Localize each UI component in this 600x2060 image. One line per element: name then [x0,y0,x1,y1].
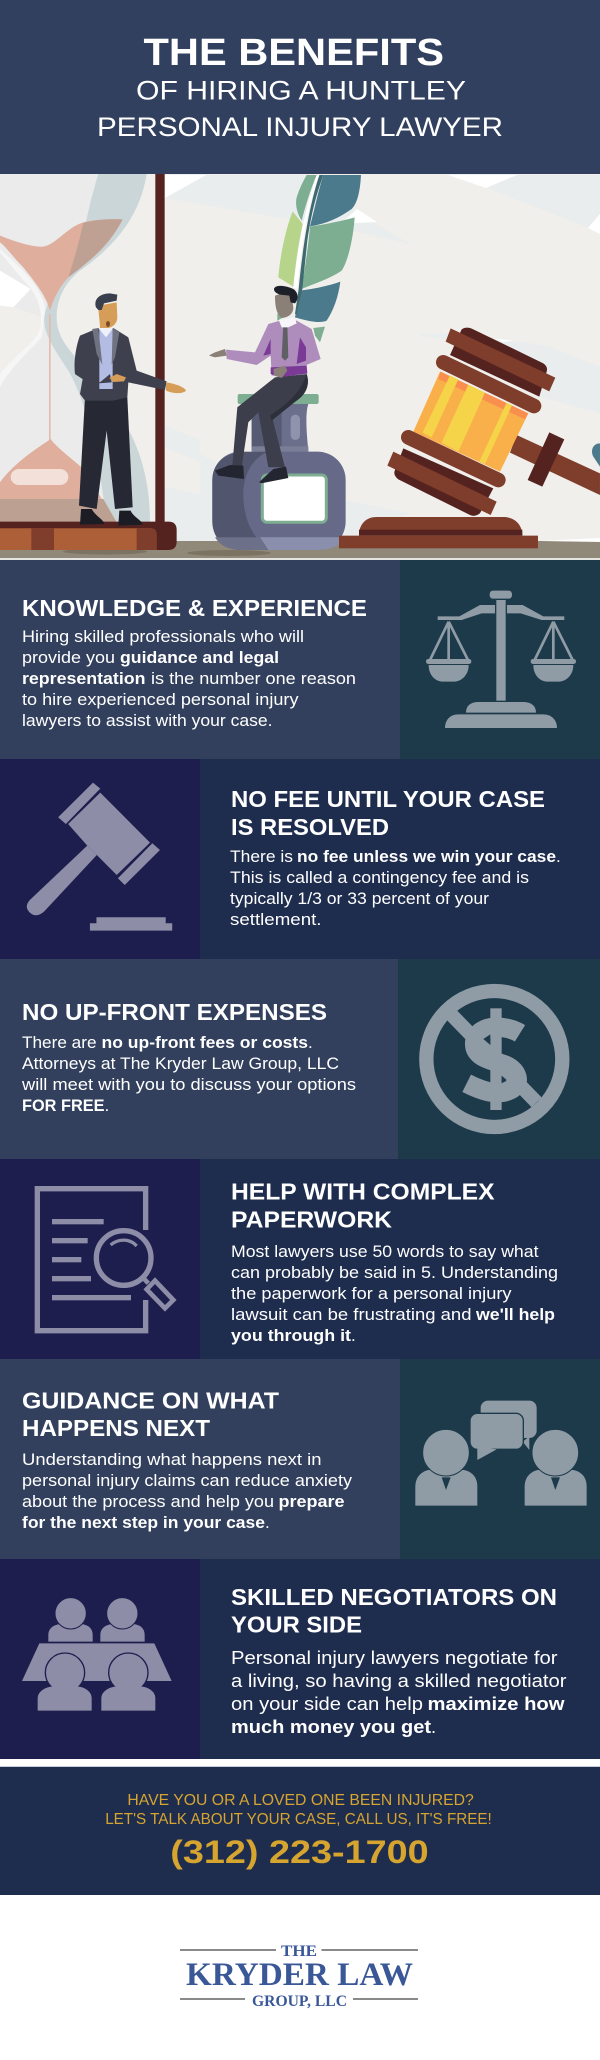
body text: the paperwork for a personal injury [231,1284,512,1303]
body text: . [308,1033,313,1052]
heading [231,1178,495,1232]
body text: to hire experienced personal injury [22,690,299,709]
icon: people around a table [22,1598,172,1711]
body text: . [104,1096,109,1115]
body text: a living, so having a skilled negotiator [231,1670,566,1691]
body text [22,1450,353,1532]
heading [22,1388,279,1441]
heading: NO UP-FRONT EXPENSES [22,999,327,1025]
heading: NO FEE UNTIL YOUR CASE [231,786,545,812]
panel: skilled negotiators [0,1559,600,1759]
title: THE BENEFITS [144,32,444,74]
icon: gavel [27,783,172,931]
body text: personal injury claims can reduce anxiety [22,1471,353,1490]
callout text: LET'S TALK ABOUT YOUR CASE, CALL US, IT'S FREE! [105,1811,492,1828]
heading [231,786,545,840]
illustration: lawyers with hourglass, quill and gavel [0,174,600,560]
panel: knowledge and experience [0,560,600,759]
body text: maximize how [428,1693,565,1714]
body text: Attorneys at The Kryder Law Group, LLC [22,1054,339,1073]
heading: HAPPENS NEXT [22,1415,210,1441]
body text [21,1033,356,1115]
body text: guidance and legal [120,648,279,667]
body text: . [556,847,561,866]
body text [230,847,561,929]
hourglass [0,174,177,550]
body text: you through it [231,1326,351,1345]
body text: much money you get [231,1716,431,1737]
body text: is the number one reason [151,669,356,688]
ground [0,538,600,560]
body text: There are [22,1033,96,1052]
body text: Hiring skilled professionals who will [22,627,304,646]
body text: for the next step in your case [22,1513,265,1532]
panel: call to action [0,1766,600,1895]
body text: typically 1/3 or 33 percent of your [230,889,489,908]
body text: can probably be said in 5. Understanding [231,1263,558,1282]
body text: we'll help [475,1305,555,1324]
body text: . [351,1326,356,1345]
body text: representation [22,669,146,688]
logo: The Kryder Law Group, LLC: KRYDER LAW [186,1957,413,1993]
panel: guidance on what happens next [0,1359,600,1559]
body text: Most lawyers use 50 words to say what [231,1242,539,1261]
body text: provide you [22,648,115,667]
heading: KNOWLEDGE & EXPERIENCE [22,595,367,621]
callout text [105,1792,492,1828]
body text [231,1647,566,1737]
heading: GUIDANCE ON WHAT [22,1388,279,1414]
phone number: (312) 223-1700 [170,1834,429,1870]
ink bottle [212,394,346,550]
heading: HELP WITH COMPLEX [231,1178,495,1204]
body text: lawyers to assist with your case. [22,711,272,730]
quill feather [277,175,361,342]
icon: two people talking [415,1401,587,1506]
panel: title header [0,0,600,174]
gavel [339,328,600,548]
body text: about the process and help you [22,1492,274,1511]
panel: help with complex paperwork [0,1159,600,1359]
seated lawyer figure [209,286,321,483]
body text: This is called a contingency fee and is [230,868,529,887]
heading: IS RESOLVED [231,814,389,840]
heading: PAPERWORK [231,1206,392,1232]
body text: will meet with you to discuss your options [21,1075,356,1094]
icon: scales of justice [426,591,576,728]
body text: There is [230,847,293,866]
panel: no fee until resolved [0,759,600,959]
icon: document with magnifier [37,1189,173,1331]
body text: prepare [278,1492,344,1511]
body text: settlement. [230,910,322,929]
body text: FOR FREE [22,1096,104,1115]
body text: no up-front fees or costs [102,1033,308,1052]
body text: Personal injury lawyers negotiate for [231,1647,558,1668]
callout text: HAVE YOU OR A LOVED ONE BEEN INJURED? [127,1792,474,1809]
body text: . [431,1716,436,1737]
body text: lawsuit can be frustrating and [231,1305,472,1324]
logo: The Kryder Law Group, LLC: THE [281,1943,317,1960]
logo: The Kryder Law Group, LLC: GROUP, LLC [252,1993,347,2010]
panel: no up-front expenses [0,959,600,1159]
body text: Understanding what happens next in [22,1450,322,1469]
title: OF HIRING A HUNTLEY [136,76,466,106]
body text [231,1242,558,1345]
heading [231,1584,557,1638]
body text [22,627,356,730]
standing lawyer figure [75,293,186,526]
body text: no fee unless we win your case [297,847,556,866]
body text: . [265,1513,270,1532]
logo: The Kryder Law Group, LLC [180,1943,418,2010]
icon: no dollar sign [426,991,562,1127]
title [97,32,503,142]
heading: SKILLED NEGOTIATORS ON [231,1584,557,1610]
heading: YOUR SIDE [231,1612,362,1638]
body text: on your side can help [231,1693,423,1714]
title: PERSONAL INJURY LAWYER [97,112,503,142]
